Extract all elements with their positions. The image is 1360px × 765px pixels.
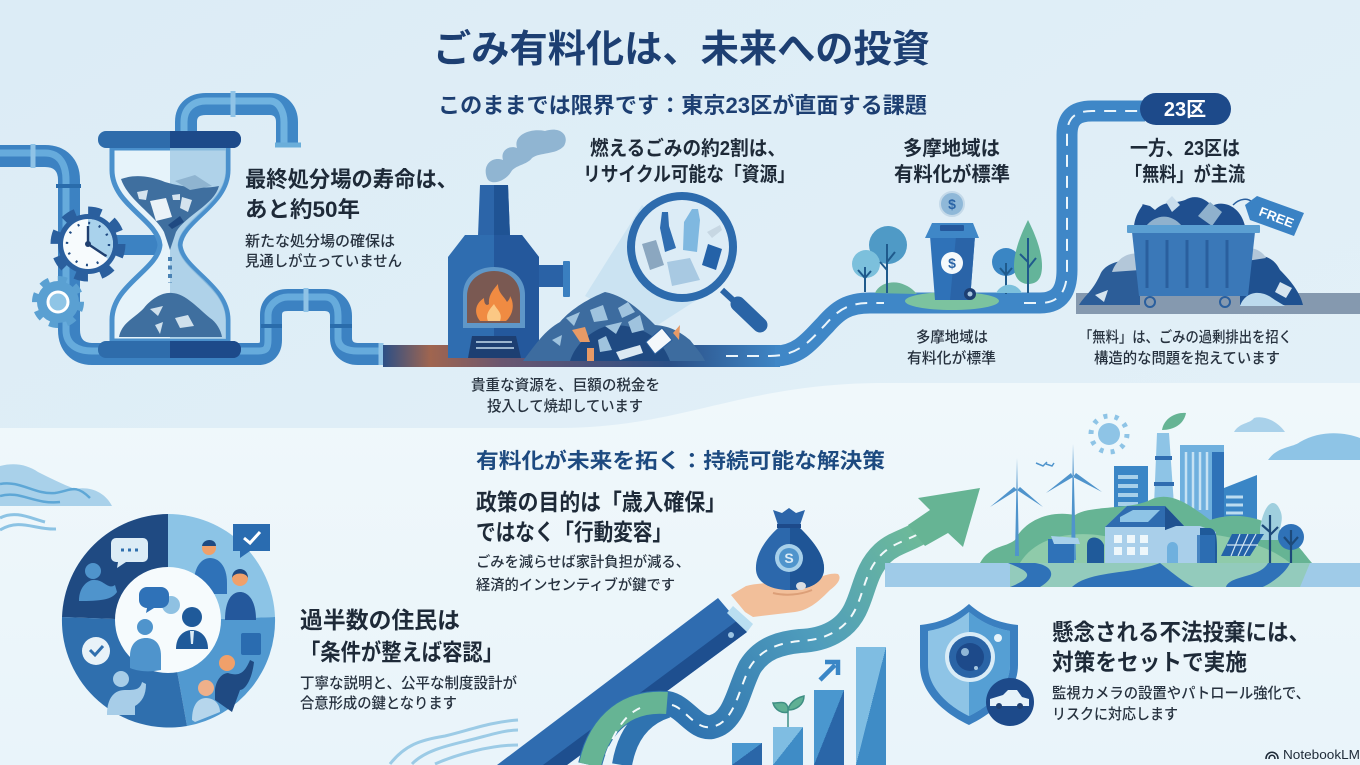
ground strip under incinerator xyxy=(383,345,780,367)
small arrow xyxy=(820,662,838,680)
text block: 23 wards heading xyxy=(1125,137,1245,186)
buildings xyxy=(1114,466,1148,531)
text block: Tama caption: 有料化が標準 xyxy=(907,349,996,367)
text block: free problem: 「無料」は、ごみの過剰排出を招く xyxy=(1079,328,1292,346)
text block: recyclable resources xyxy=(583,136,795,186)
hourglass bars xyxy=(98,131,241,358)
text block: landfill lifespan xyxy=(245,167,458,270)
trees xyxy=(875,282,917,294)
bottom-left person xyxy=(82,637,110,665)
money bag xyxy=(756,508,824,590)
segment: bottom-left xyxy=(62,617,187,728)
text block: Tama heading: 有料化が標準 xyxy=(894,162,1010,186)
text block: burning with tax: 貴重な資源を、巨額の税金を xyxy=(471,377,660,394)
shed left xyxy=(1048,539,1074,563)
solar panel xyxy=(1221,534,1264,556)
chimney xyxy=(478,185,510,236)
water strip xyxy=(885,563,1360,587)
FREE tag: FREE xyxy=(1257,204,1296,231)
text block: illegal dumping: 監視カメラの設置やパトロール強化で、 xyxy=(1052,685,1310,702)
green base xyxy=(905,292,999,310)
panel: incinerator xyxy=(448,130,570,358)
wind turbines xyxy=(990,458,1043,556)
sun xyxy=(1091,416,1127,452)
text block: free problem: 構造的な問題を抱えています xyxy=(1094,349,1280,367)
trees right xyxy=(1278,524,1304,550)
icon: clock gear xyxy=(55,211,121,277)
text block: policy goal xyxy=(476,489,726,594)
center people xyxy=(137,619,153,635)
flame xyxy=(476,284,513,321)
text block: policy goal: ごみを減らせば家計負担が減る、 xyxy=(476,553,690,571)
text block: landfill lifespan: 新たな処分場の確保は xyxy=(245,233,395,250)
text block: 23 wards heading: 「無料」が主流 xyxy=(1125,162,1245,186)
decoration: waves bottom center xyxy=(390,720,518,764)
text block: recyclable resources: 燃えるごみの約2割は、 xyxy=(590,136,786,160)
road: rising green arrow path xyxy=(590,516,950,765)
text block: Tama caption xyxy=(907,328,996,367)
icon: small gear xyxy=(35,279,81,325)
trash above dumpster xyxy=(1134,197,1245,226)
small house xyxy=(1160,526,1216,563)
gray road strip at right xyxy=(1076,293,1360,314)
badge: 23 wards xyxy=(1140,93,1231,125)
icon: security shield with camera and car xyxy=(920,604,1034,726)
panel: Tama paid bin with trees xyxy=(852,192,1042,310)
smoke xyxy=(486,130,566,182)
birds xyxy=(1036,462,1054,466)
text block: policy goal: 政策の目的は「歳入確保」 xyxy=(476,489,726,515)
text block: residents: 過半数の住民は xyxy=(300,607,460,633)
panel: Tama paid bin with trees: $ xyxy=(948,255,956,271)
decoration: cloud and waves left xyxy=(0,464,112,530)
segment: top-left xyxy=(62,514,168,621)
text block: residents xyxy=(300,607,517,712)
text block: illegal dumping: 懸念される不法投棄には、 xyxy=(1052,619,1310,645)
text block: landfill lifespan: 見通しが立っていません xyxy=(245,252,402,270)
text block: residents: 合意形成の鍵となります xyxy=(300,695,457,712)
segment: bottom-right xyxy=(168,617,275,726)
patrol car xyxy=(986,678,1034,726)
furnace body xyxy=(448,235,539,358)
top-right people xyxy=(202,541,216,555)
panel: landfill hourglass and pipes xyxy=(0,91,382,365)
text block: landfill lifespan: あと約50年 xyxy=(245,197,360,222)
FREE tag xyxy=(1233,196,1304,236)
text block: burning with tax: 投入して焼却しています xyxy=(487,398,643,415)
hand xyxy=(731,574,840,617)
arrow head xyxy=(908,488,980,547)
sleeve xyxy=(497,598,747,765)
panel: Tama paid bin with trees: $ xyxy=(948,196,956,212)
check callout xyxy=(233,524,270,558)
text block: policy goal: ではなく「行動変容」 xyxy=(476,519,672,545)
text block: 23 wards heading: 一方、23区は xyxy=(1130,137,1240,160)
sand: waste top xyxy=(121,176,219,250)
surrounding waste xyxy=(1079,261,1140,305)
hills xyxy=(980,497,1312,563)
badge: 23 wards: 23区 xyxy=(1164,99,1206,121)
icon: magnifier with recyclables xyxy=(631,196,760,325)
text block: free problem xyxy=(1079,328,1292,367)
top-left speech and person xyxy=(111,538,148,568)
watermark: NotebookLM: NotebookLM xyxy=(1283,747,1360,762)
panel: sustainable city xyxy=(885,413,1360,587)
text block: residents: 「条件が整えば容認」 xyxy=(300,639,503,665)
text block: burning with tax xyxy=(471,377,660,415)
river xyxy=(1008,563,1290,587)
text block: Tama heading: 多摩地域は xyxy=(903,137,1000,160)
center white circle xyxy=(115,567,221,673)
road: upper route to 23 wards xyxy=(726,111,1145,356)
dumpster body xyxy=(1132,232,1255,296)
cuff xyxy=(727,606,753,632)
hourglass xyxy=(112,148,228,341)
subtitle: challenges: このままでは限界です：東京23区が直面する課題 xyxy=(438,93,927,118)
segment: top-right xyxy=(168,514,275,621)
door xyxy=(463,267,525,328)
text block: illegal dumping xyxy=(1052,619,1310,723)
sand: waste bottom xyxy=(119,293,222,337)
bin xyxy=(930,236,975,300)
camera lens xyxy=(945,632,995,682)
panel: waste pile xyxy=(523,292,705,361)
background: lower section xyxy=(0,383,1360,765)
text block: recyclable resources: リサイクル可能な「資源」 xyxy=(583,163,795,186)
light cone from pile to magnifier xyxy=(585,205,720,330)
coin xyxy=(940,192,964,216)
panel: free overflowing dumpster xyxy=(1079,196,1304,307)
text block: policy goal: 経済的インセンティブが鍵です xyxy=(476,576,675,594)
sprout xyxy=(773,696,804,727)
pipes xyxy=(0,91,382,365)
money bag: S xyxy=(784,550,794,566)
title: ごみ有料化は、未来への投資 xyxy=(433,29,930,71)
text block: residents: 丁寧な説明と、公平な制度設計が xyxy=(300,674,517,692)
main house xyxy=(1105,506,1185,563)
text block: landfill lifespan: 最終処分場の寿命は、 xyxy=(245,167,458,192)
ground green xyxy=(1010,563,1310,587)
center speech bubbles xyxy=(162,596,180,614)
panel: residents consensus circle xyxy=(62,514,275,728)
clouds xyxy=(1234,417,1285,432)
text block: Tama heading xyxy=(894,137,1010,186)
leaf xyxy=(1162,413,1186,430)
text block: illegal dumping: 対策をセットで実施 xyxy=(1052,649,1247,675)
text block: illegal dumping: リスクに対応します xyxy=(1052,706,1178,723)
bottom-right people xyxy=(241,633,261,655)
subtitle: solutions: 有料化が未来を拓く：持続可能な解決策 xyxy=(476,449,885,473)
vent xyxy=(468,336,521,358)
falling particles xyxy=(168,257,172,283)
bar chart: growth xyxy=(732,647,886,765)
text block: Tama caption: 多摩地域は xyxy=(916,328,988,346)
illustration: arm holding money bag xyxy=(497,508,840,765)
